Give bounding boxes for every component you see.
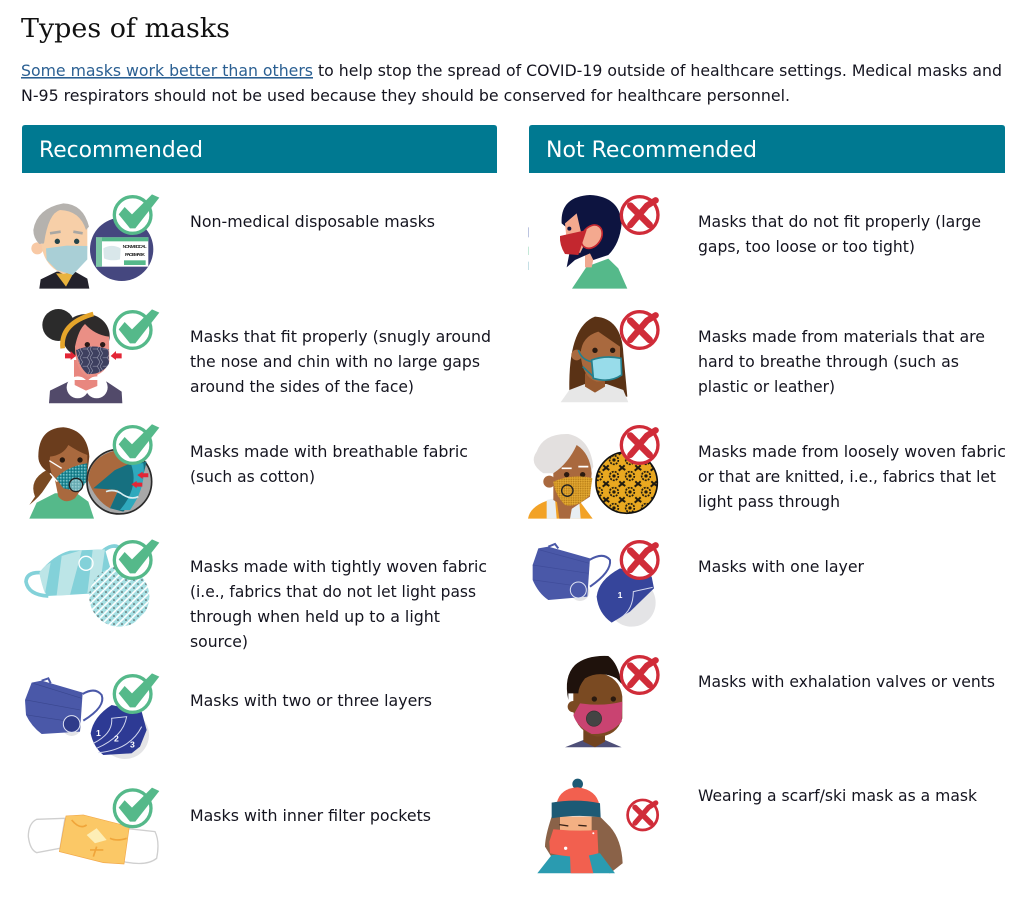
- row: exhalation valves: [565, 656, 995, 747]
- icon: man with valve mask: [565, 656, 658, 747]
- row: one layer: [533, 542, 865, 627]
- header: recommended: [22, 125, 497, 173]
- icon: woman with breathable fabric mask: [29, 424, 159, 519]
- row: inner filter pockets: [28, 788, 431, 864]
- icon: woman wearing scarf and hat: [537, 779, 658, 873]
- icon: blue mask showing three layers: 2: [114, 733, 119, 743]
- text: hard to breathe through: Masks made from materials that are: [698, 327, 985, 346]
- row: loosely woven: [528, 427, 1006, 519]
- row: breathable fabric: [29, 424, 468, 519]
- icon: yellow mask with filter pocket: [28, 788, 159, 864]
- text: loosely woven: Masks made from loosely woven fabric: [698, 442, 1006, 461]
- icon: woman with fitted patterned mask: [42, 309, 159, 403]
- text: exhalation valves: Masks with exhalation valves or vents: [698, 672, 995, 691]
- row: scarf or ski mask: [537, 779, 978, 873]
- icon: blue mask showing three layers: 3: [130, 739, 135, 749]
- row: non-medical disposable masks: [31, 194, 435, 289]
- text: loosely woven: light pass through: [698, 492, 840, 511]
- text: breathable fabric: Masks made with breathable fabric: [190, 442, 468, 461]
- text: tightly woven fabric: source): [190, 632, 248, 651]
- icon: woman with plastic mask: [561, 312, 658, 402]
- title: Types of masks: [21, 13, 230, 44]
- text: hard to breathe through: [698, 327, 985, 396]
- icon: side-profile woman with loose red mask: [528, 195, 658, 289]
- text: masks that fit properly: around the sides of the face): [190, 377, 414, 396]
- text: masks that fit properly: [190, 327, 491, 396]
- icon: older man with disposable mask: NON MEDICAL: [123, 244, 147, 250]
- row: tightly woven fabric: [26, 539, 487, 651]
- text: loosely woven: [698, 442, 1006, 511]
- icon: blue mask showing three layers: [25, 673, 159, 759]
- icon: blue mask showing one layer: 1: [618, 590, 623, 600]
- icon: blue mask showing one layer: [533, 542, 658, 627]
- panel: recommended: [22, 125, 497, 864]
- intro text: N-95 respirators should not be used because they should be conserved for healthcare personnel.: [21, 86, 790, 105]
- text: poor fit: gaps, too loose or too tight): [698, 237, 915, 256]
- header: not recommended: Not Recommended: [546, 137, 757, 163]
- intro text: Some masks work better than others: [21, 61, 313, 80]
- text: hard to breathe through: hard to breathe through (such as: [698, 352, 959, 371]
- text: tightly woven fabric: [190, 557, 487, 651]
- text: breathable fabric: (such as cotton): [190, 467, 315, 486]
- text: breathable fabric: [190, 442, 468, 486]
- text: poor fit: Masks that do not fit properly (large: [698, 212, 981, 231]
- text: tightly woven fabric: through when held up to a light: [190, 607, 440, 626]
- icon: blue mask showing three layers: 1: [96, 728, 101, 738]
- text: hard to breathe through: plastic or leather): [698, 377, 835, 396]
- header: recommended: Recommended: [39, 137, 203, 163]
- icon: older man with disposable mask: FACE MASK: [125, 252, 145, 258]
- text: scarf or ski mask: Wearing a scarf/ski mask as a mask: [698, 786, 978, 805]
- panel: not recommended: [528, 125, 1006, 873]
- icon: older man with disposable mask: [31, 194, 159, 289]
- header: not recommended: [529, 125, 1005, 173]
- text: masks that fit properly: Masks that fit properly (snugly around: [190, 327, 491, 346]
- icon: striped mask with woven fabric swatch: [26, 539, 159, 627]
- row: two or three layers: [25, 673, 432, 759]
- text: masks that fit properly: the nose and chin with no large gaps: [190, 352, 480, 371]
- text: one layer: Masks with one layer: [698, 557, 865, 576]
- row: poor fit: [528, 195, 981, 289]
- row: hard to breathe through: [561, 312, 985, 402]
- text: inner filter pockets: Masks with inner filter pockets: [190, 806, 431, 825]
- row: masks that fit properly: [42, 309, 491, 403]
- text: tightly woven fabric: Masks made with tightly woven fabric: [190, 557, 487, 576]
- icon: older woman with knitted mask: [528, 427, 658, 519]
- intro text: to help stop the spread of COVID-19 outside of healthcare settings. Medical masks and: [318, 61, 1002, 80]
- text: tightly woven fabric: (i.e., fabrics that do not let light pass: [190, 582, 476, 601]
- text: non-medical disposable masks: Non-medical disposable masks: [190, 212, 435, 231]
- text: loosely woven: or that are knitted, i.e., fabrics that let: [698, 467, 996, 486]
- text: two or three layers: Masks with two or three layers: [190, 691, 432, 710]
- intro text: [21, 61, 1002, 105]
- text: poor fit: [698, 212, 981, 256]
